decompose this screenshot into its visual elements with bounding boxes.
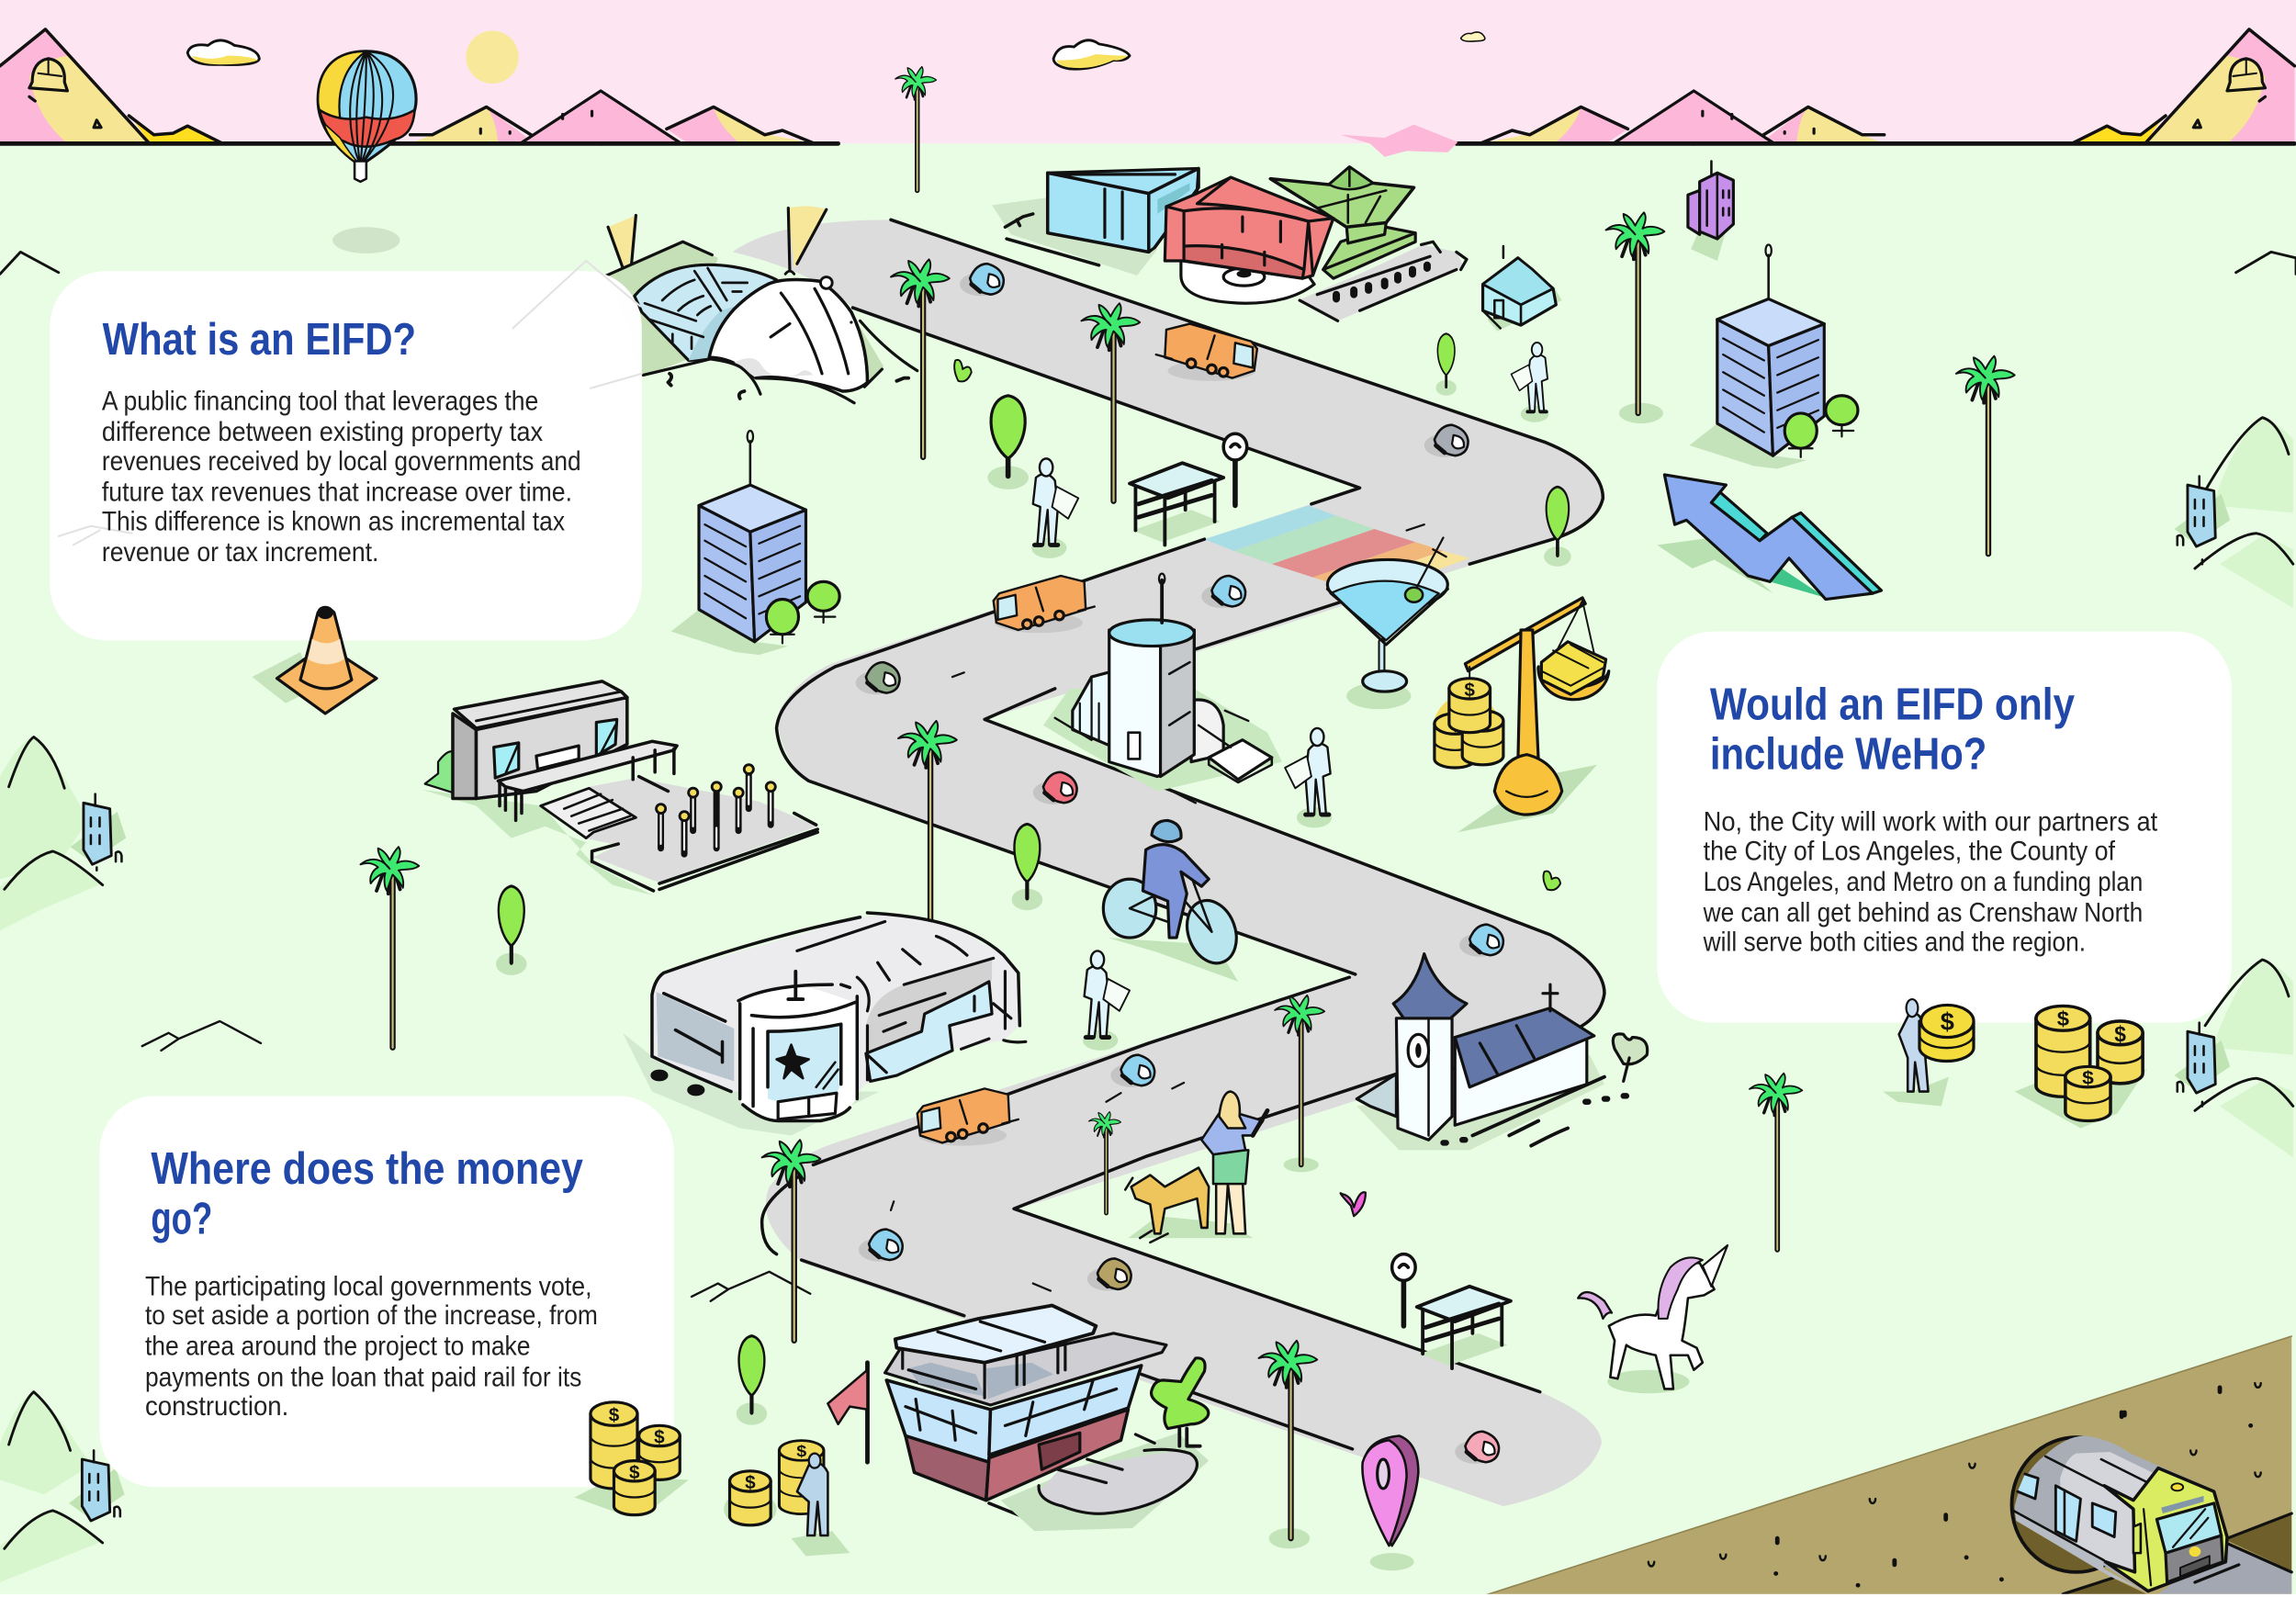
rainbow crosswalk xyxy=(1204,505,1469,595)
white plaza disc xyxy=(1181,249,1314,303)
tunnel ring xyxy=(2011,1437,2141,1572)
cloud middle xyxy=(1053,40,1130,69)
blue tower left xyxy=(671,431,839,655)
unicorn xyxy=(1578,1245,1728,1393)
body text xyxy=(102,387,581,568)
location pin xyxy=(1362,1436,1418,1570)
bus stop benches xyxy=(1130,433,1511,1368)
body text xyxy=(145,1271,598,1422)
palm 4 xyxy=(1606,212,1664,423)
palm 11 xyxy=(762,1140,820,1341)
gold coin stacks bottom left xyxy=(574,1402,689,1515)
traffic cone xyxy=(252,607,377,714)
red building xyxy=(1165,177,1334,278)
cloud left xyxy=(187,40,259,64)
green blob tree xyxy=(1152,1358,1209,1446)
small blue house xyxy=(1483,246,1562,332)
info panel: What is an EIFD? xyxy=(50,261,642,640)
green bush xyxy=(425,751,453,793)
info panel: Where does the money go? xyxy=(99,1096,674,1487)
palm 5 xyxy=(1956,356,2015,554)
heading: go? xyxy=(151,1193,212,1243)
body text: to set aside a portion of the increase, from xyxy=(145,1300,598,1331)
palm 12 xyxy=(1258,1341,1317,1548)
palm trees xyxy=(360,67,2015,1548)
lamp bollards xyxy=(661,770,771,854)
body text: The participating local governments vote, xyxy=(145,1271,592,1301)
purple building xyxy=(1688,161,1733,261)
palm 10 xyxy=(1750,1074,1802,1250)
cloud small xyxy=(1461,32,1485,41)
ground shade xyxy=(623,1033,879,1135)
pink hill at horizon xyxy=(1341,125,1458,157)
yellow front xyxy=(2104,1468,2227,1591)
body text: the area around the project to make xyxy=(145,1332,531,1362)
ground shade xyxy=(422,790,652,895)
roof canopy xyxy=(895,1306,1096,1363)
flag xyxy=(827,1363,867,1462)
heading: What is an EIFD? xyxy=(103,314,416,365)
ground shade xyxy=(992,197,1157,276)
body text: difference between existing property tax xyxy=(102,417,543,447)
upper glazed room xyxy=(885,1333,1166,1405)
growth arrow xyxy=(1657,475,1882,600)
grey plaza xyxy=(585,777,817,891)
sun xyxy=(466,31,519,84)
underground soil xyxy=(1484,1336,2291,1595)
round trees xyxy=(496,333,1571,1425)
palm 6 xyxy=(898,721,957,920)
cyclist xyxy=(1103,820,1244,982)
blue building xyxy=(1005,168,1199,265)
terrace xyxy=(498,741,677,820)
central cylindrical tower xyxy=(1043,574,1282,803)
cars on road xyxy=(856,264,1503,1464)
church with clock tower xyxy=(1356,954,1648,1150)
maroon base xyxy=(906,1436,989,1501)
info panel: Would an EIFD only include WeHo? xyxy=(1657,632,2232,1023)
body text: This difference is known as incremental tax xyxy=(102,507,565,537)
left mountain range xyxy=(0,29,838,143)
cylinder entrance xyxy=(738,972,857,1120)
gold coin stacks right xyxy=(2015,1006,2146,1128)
heading: Where does the money xyxy=(151,1143,583,1194)
balance scale with coins and gold xyxy=(1433,598,1609,832)
metro train in tunnel xyxy=(2011,1436,2291,1594)
people with plans xyxy=(1031,343,1548,1051)
train body xyxy=(2015,1436,2214,1591)
palm 1 xyxy=(895,67,936,190)
top museum complex xyxy=(992,167,1467,321)
track trench xyxy=(2225,1513,2291,1570)
glass and maroon building xyxy=(885,1306,1209,1531)
body text: Los Angeles, and Metro on a funding plan xyxy=(1704,867,2143,897)
body text: A public financing tool that leverages the xyxy=(102,387,538,417)
butterfly xyxy=(1341,1192,1366,1216)
main hall xyxy=(652,913,1026,1095)
body text: construction. xyxy=(145,1391,288,1422)
person with large coin stack xyxy=(1883,999,1974,1107)
body text: revenue or tax increment. xyxy=(102,537,378,568)
blue glass walls xyxy=(886,1380,990,1462)
martini glass xyxy=(1327,538,1447,709)
green pavilion xyxy=(1270,167,1415,278)
heading xyxy=(1710,679,2076,780)
body text: revenues received by local governments and xyxy=(102,446,581,477)
body text xyxy=(1703,807,2157,957)
serpentine road xyxy=(733,219,1604,1526)
blue tower right xyxy=(1690,244,1858,469)
heading: Would an EIFD only xyxy=(1710,679,2076,729)
palm 3 xyxy=(1081,303,1140,501)
hot air balloon xyxy=(318,51,416,253)
white museum building xyxy=(623,913,1026,1135)
main block xyxy=(453,681,627,799)
body text: we can all get behind as Crenshaw North xyxy=(1703,898,2143,928)
driveway xyxy=(1001,1433,1209,1531)
body text: No, the City will work with our partners at xyxy=(1704,807,2157,838)
body text: payments on the loan that paid rail for its xyxy=(145,1362,581,1392)
person with large coin stack: $ xyxy=(1941,1007,1954,1036)
body text: the City of Los Angeles, the County of xyxy=(1704,837,2116,867)
buses on road xyxy=(917,324,1257,1146)
tiny green shrubs xyxy=(954,360,1560,890)
body text: future tax revenues that increase over time. xyxy=(102,478,572,508)
body text: will serve both cities and the region. xyxy=(1703,927,2086,957)
background sky xyxy=(0,0,2296,143)
domed observatory xyxy=(606,207,917,403)
woman walking dog xyxy=(1125,1092,1267,1243)
heading: include WeHo? xyxy=(1710,729,1986,780)
palm 7 xyxy=(360,847,419,1048)
government building with plaza xyxy=(422,681,817,895)
palm 9 xyxy=(1088,1112,1120,1213)
heading xyxy=(151,1143,583,1243)
page edge strip xyxy=(0,1594,2296,1597)
palm 8 xyxy=(1275,995,1324,1172)
right mountain range xyxy=(1457,29,2294,143)
palm 2 xyxy=(891,259,950,457)
person carrying coins xyxy=(724,1441,850,1556)
stairs xyxy=(541,788,636,838)
grey plaza with dots xyxy=(1299,242,1467,321)
